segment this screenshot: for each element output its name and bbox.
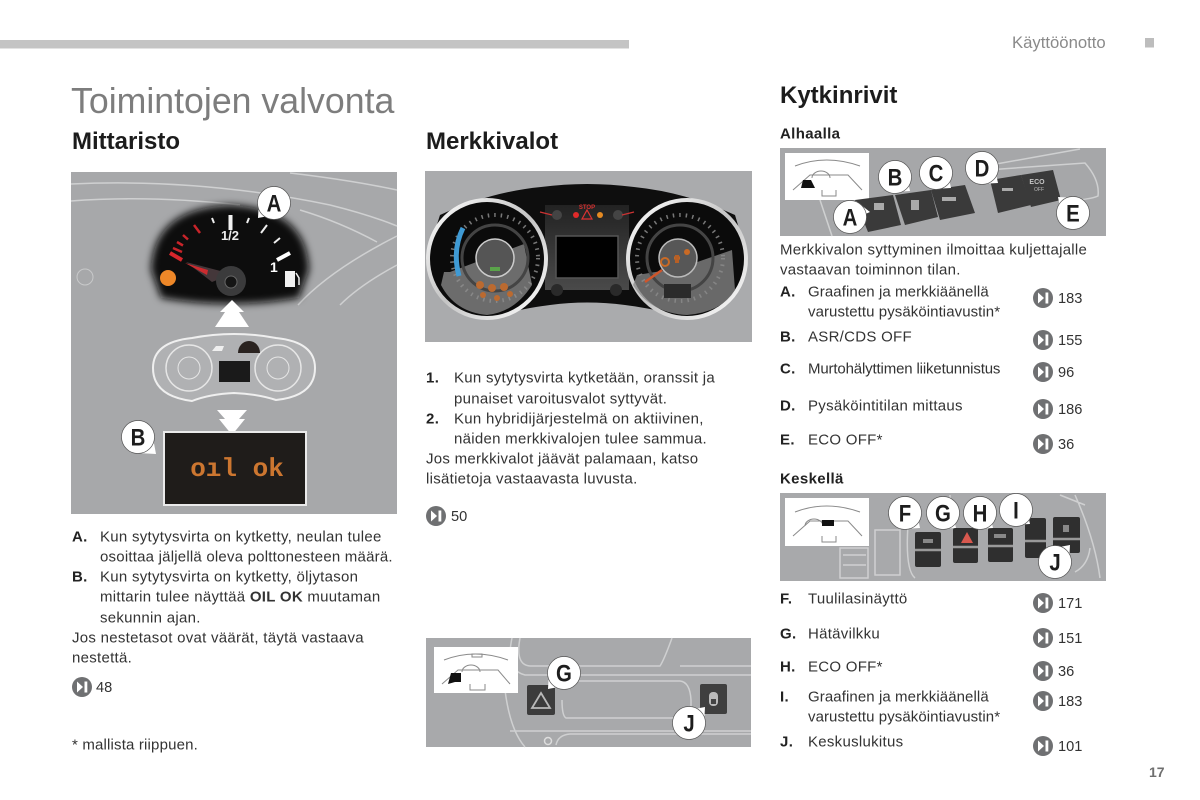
list: lower switches: D.: [780, 398, 796, 415]
callout G: [548, 656, 580, 690]
switch keys: ECO: [1029, 179, 1045, 186]
list: centre switches: J.: [780, 734, 793, 751]
intro text: kytkinrivit: Merkkivalon syttyminen ilmoittaa kuljettajalle: [780, 242, 1087, 259]
footnote: * mallista riippuen.: [72, 737, 198, 754]
callout B: B: [131, 424, 145, 451]
left dial: [428, 200, 546, 318]
switch keys: [915, 517, 1080, 567]
list: centre switches: Keskuslukitus: [808, 734, 903, 751]
oil display: [164, 432, 306, 505]
text block: mittaristo: nestettä.: [72, 650, 132, 667]
list: centre switches: 36: [1058, 664, 1074, 680]
list: lower switches: 36: [1058, 437, 1074, 453]
list: lower switches: 96: [1058, 365, 1074, 381]
page ref 50: [426, 506, 467, 526]
list: lower switches: Murtohälyttimen liiketunnistus: [808, 361, 1000, 378]
chapter title: Käyttöönotto: [1012, 33, 1106, 52]
text block: merkkivalot: [426, 370, 715, 488]
text block: mittaristo: sekunnin ajan.: [100, 610, 201, 627]
subheading: Alhaalla: Alhaalla: [780, 126, 841, 143]
heading: Merkkivalot: Merkkivalot: [426, 128, 558, 155]
text block: merkkivalot: Kun sytytysvirta kytketään, oranssit ja: [454, 370, 715, 387]
list: lower switches: B.: [780, 329, 796, 346]
text block: merkkivalot: näiden merkkivalojen tulee sammua.: [454, 431, 707, 448]
list: lower switches: Graafinen ja merkkiäänellä: [808, 284, 989, 301]
list: centre switches: 151: [1058, 631, 1082, 647]
callout A: A: [267, 190, 281, 217]
callout F: [888, 496, 922, 530]
right dial: [628, 200, 746, 318]
text block: mittaristo: B.: [72, 569, 88, 586]
centre display: [556, 236, 618, 278]
inset: dashboard locator: [434, 647, 518, 693]
heading: Kytkinrivit: Kytkinrivit: [780, 82, 897, 109]
panel: lower switches: [780, 148, 1106, 236]
list: centre switches: 183: [1058, 694, 1082, 710]
panel: door switches: [426, 638, 751, 747]
list: centre switches: 101: [1058, 739, 1082, 755]
list: lower switches: A.: [780, 284, 796, 301]
callout G: G: [935, 500, 951, 527]
fuel gauge: 1: [270, 259, 278, 275]
switch keys: [855, 170, 1061, 232]
callout A: [834, 200, 870, 234]
callout C: C: [929, 160, 943, 187]
callout H: [964, 496, 996, 530]
text block: merkkivalot: Kun hybridijärjestelmä on aktiivinen,: [454, 411, 704, 428]
list: lower switches: [780, 284, 1082, 454]
text block: merkkivalot: 2.: [426, 411, 439, 428]
page number: 17: [1149, 764, 1165, 780]
callout C: [920, 156, 952, 190]
callout B: [878, 160, 912, 194]
list: centre switches: H.: [780, 659, 796, 676]
panel: centre switches: [780, 493, 1106, 581]
list: centre switches: varustettu pysäköintiavustin*: [808, 709, 1000, 726]
intro text: kytkinrivit: [780, 242, 1087, 279]
intro text: kytkinrivit: vastaavan toiminnon tilan.: [780, 262, 961, 279]
list: lower switches: ASR/CDS OFF: [808, 329, 912, 346]
list: centre switches: Graafinen ja merkkiäänellä: [808, 689, 989, 706]
list: centre switches: 171: [1058, 596, 1082, 612]
text block: mittaristo: mittarin tulee näyttää OIL OK muutaman: [100, 589, 380, 606]
callout D: [966, 152, 998, 184]
page title: Toimintojen valvonta: [71, 81, 394, 121]
list: lower switches: E.: [780, 432, 795, 449]
fuel gauge: [151, 205, 309, 304]
panel: warning lights cluster: [425, 171, 752, 342]
text block: merkkivalot: lisätietoja vastaavasta luvusta.: [426, 471, 638, 488]
fuel gauge: 1/2: [221, 228, 239, 243]
callout I: [1000, 494, 1032, 526]
callout I: I: [1013, 497, 1019, 524]
callout H: H: [973, 500, 987, 527]
callout J: J: [683, 710, 695, 737]
list: centre switches: F.: [780, 591, 792, 608]
list: lower switches: C.: [780, 361, 796, 378]
callout F: F: [899, 500, 911, 527]
list: lower switches: 183: [1058, 291, 1082, 307]
callout E: E: [1066, 200, 1080, 227]
header bar: [0, 40, 629, 48]
arrows down: [217, 410, 247, 435]
switch keys: OFF: [1034, 187, 1044, 193]
text block: mittaristo: Kun sytytysvirta on kytketty, öljytason: [100, 569, 358, 586]
callout B: [122, 420, 156, 454]
panel: instrument cluster fuel gauge and display: [71, 172, 397, 514]
text block: mittaristo: Kun sytytysvirta on kytketty, neulan tulee: [100, 529, 382, 546]
list: centre switches: Hätävilkku: [808, 626, 880, 643]
small warning lights: STOP: [579, 205, 595, 211]
page ref 48: 48: [96, 680, 112, 696]
list: lower switches: ECO OFF*: [808, 432, 883, 449]
chapter marker: [1145, 38, 1154, 48]
list: centre switches: [780, 591, 1082, 756]
text block: mittaristo: Jos nestetasot ovat väärät, täytä vastaava: [72, 630, 364, 647]
list: lower switches: 155: [1058, 333, 1082, 349]
small cluster outline: [153, 334, 315, 401]
text block: merkkivalot: 1.: [426, 370, 439, 387]
callout J: J: [1049, 549, 1061, 576]
callout J: [1038, 545, 1072, 578]
callout D: D: [975, 155, 989, 182]
list: centre switches: Tuulilasinäyttö: [808, 591, 908, 608]
small warning lights: [540, 205, 634, 220]
arrows up: [215, 300, 249, 327]
callout A: A: [843, 204, 857, 231]
list: centre switches: G.: [780, 626, 797, 643]
oil display: oıl ok: [190, 454, 284, 484]
list: lower switches: 186: [1058, 402, 1082, 418]
text block: mittaristo: A.: [72, 529, 88, 546]
lock key: [700, 684, 727, 714]
heading: Mittaristo: Mittaristo: [72, 128, 180, 155]
subheading: Keskellä: Keskellä: [780, 471, 844, 488]
text block: merkkivalot: punaiset varoitusvalot syttyvät.: [454, 391, 667, 408]
list: lower switches: varustettu pysäköintiavustin*: [808, 304, 1000, 321]
callout J: [672, 706, 706, 740]
callout E: [1056, 196, 1090, 230]
page ref 48: [72, 677, 112, 697]
page ref 50: 50: [451, 509, 467, 525]
hazard key: [527, 685, 555, 715]
list: centre switches: ECO OFF*: [808, 659, 883, 676]
callout B: B: [888, 164, 902, 191]
text block: mittaristo: osoittaa jäljellä oleva polttonesteen määrä.: [100, 549, 393, 566]
callout G: G: [556, 660, 572, 687]
list: lower switches: Pysäköintitilan mittaus: [808, 398, 963, 415]
inset: dashboard locator: [785, 498, 869, 546]
list: centre switches: I.: [780, 689, 789, 706]
inset: dashboard locator: [785, 153, 869, 200]
text block: mittaristo: [72, 529, 393, 667]
callout G: [926, 496, 960, 530]
callout A: [258, 186, 290, 220]
text block: merkkivalot: Jos merkkivalot jäävät palamaan, katso: [426, 451, 698, 468]
